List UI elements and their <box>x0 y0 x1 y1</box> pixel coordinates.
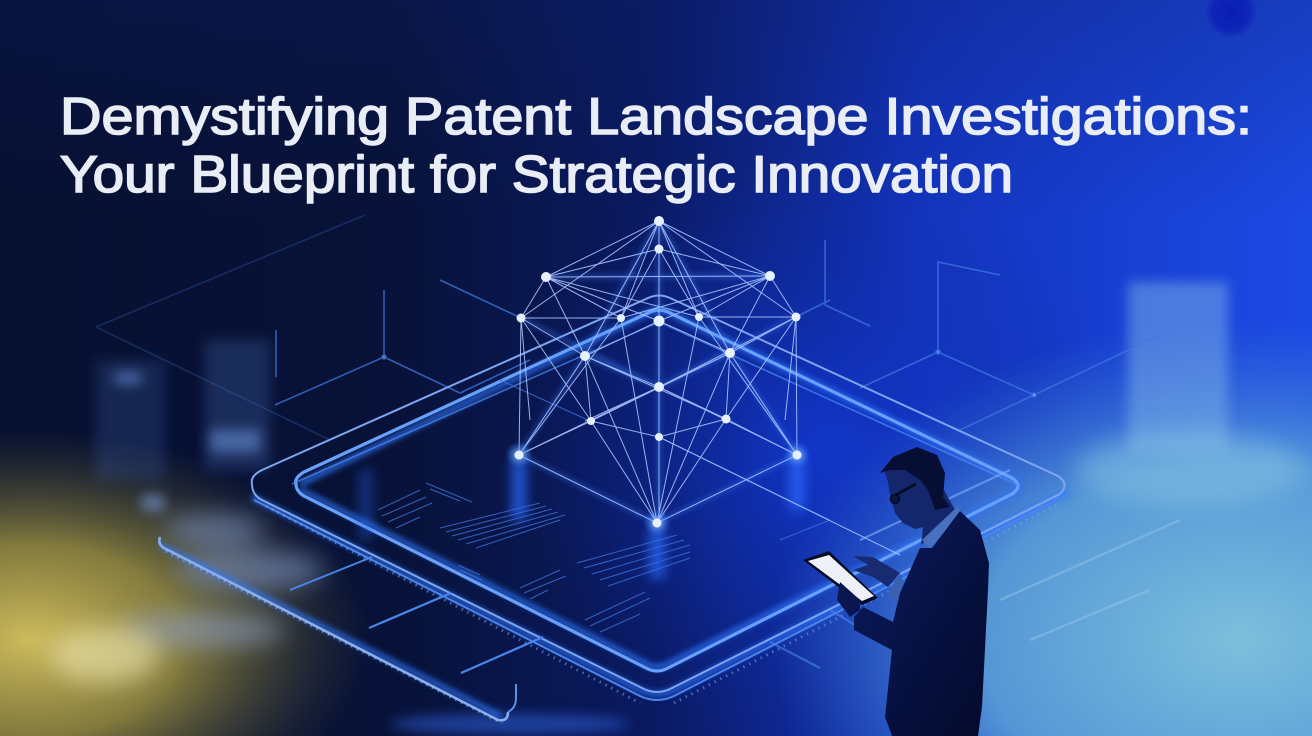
network glow <box>519 221 797 523</box>
shirt cuff <box>888 573 903 603</box>
platform: connector traces <box>290 470 1180 673</box>
glasses <box>892 484 916 497</box>
face and neck <box>884 465 955 545</box>
network graph <box>519 221 900 555</box>
platform: outer board <box>159 296 1068 723</box>
platform glow <box>160 310 1068 716</box>
blurred city: right <box>1075 0 1305 506</box>
suit body <box>854 511 989 736</box>
holding hand <box>837 582 860 617</box>
network nodes <box>505 216 811 537</box>
glasses lens <box>890 494 900 504</box>
blurred light clouds: left <box>50 514 325 683</box>
vertical node glows <box>360 460 804 578</box>
title line 1: Demystifying Patent Landscape Investigations: <box>60 88 1252 146</box>
blurred city: left <box>95 340 630 734</box>
side circuit traces <box>96 215 1160 440</box>
platform: document text lines <box>378 380 830 632</box>
shirt collar <box>922 506 962 548</box>
hair <box>880 447 950 510</box>
person with tablet <box>803 447 989 736</box>
title <box>60 88 1252 204</box>
title line 2: Your Blueprint for Strategic Innovation <box>60 146 1013 204</box>
pointing hand <box>853 556 900 587</box>
tablet <box>803 551 878 605</box>
